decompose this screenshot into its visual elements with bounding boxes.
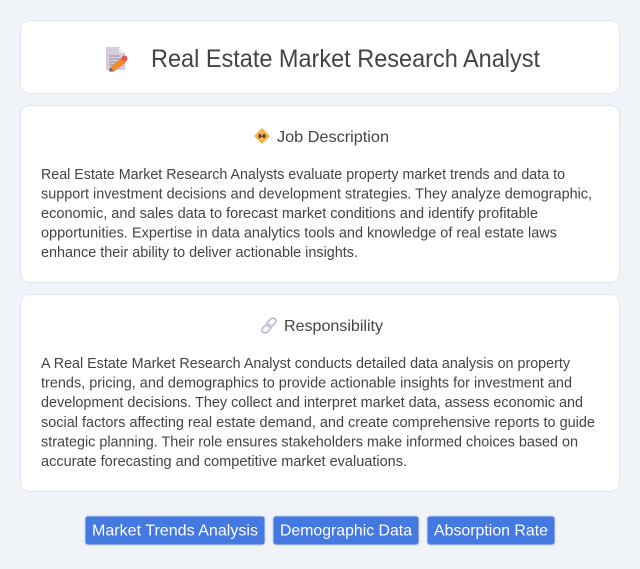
text block: responsibility: development decisions. They collect and interpret market data, assess economic and xyxy=(41,395,583,411)
tag: market trends analysis: Market Trends Analysis xyxy=(92,522,258,540)
text block: responsibility: A Real Estate Market Research Analyst conducts detailed data analysis on property xyxy=(41,356,571,372)
tag: demographic data xyxy=(273,516,419,545)
text block: job description: support investment decisions and development strategies. They analyze demographic, xyxy=(41,186,592,202)
tag: absorption rate xyxy=(427,516,555,545)
heading: job description: Job Description xyxy=(277,129,389,146)
heading: responsibility: Responsibility xyxy=(284,318,383,335)
text block: job description xyxy=(41,167,592,261)
icon: diamond sign xyxy=(254,128,270,144)
text block: job description: Real Estate Market Research Analysts evaluate property market trends and data to xyxy=(41,167,565,183)
tag: absorption rate: Absorption Rate xyxy=(434,522,548,540)
title: Real Estate Market Research Analyst xyxy=(151,45,540,73)
text block: responsibility: social factors affecting real estate demand, and create comprehensive reports to guide xyxy=(41,415,595,431)
panel: responsibility xyxy=(20,294,620,492)
text block: responsibility: strategic planning. Their role ensures stakeholders make informed choices based on xyxy=(41,434,578,450)
icon: document with pencil xyxy=(106,47,128,72)
text block: responsibility xyxy=(41,356,595,470)
text block: job description: opportunities. Expertise in data analytics tools and knowledge of real estate laws xyxy=(41,226,557,242)
panel: job description xyxy=(20,106,620,282)
text block: job description: economic, and sales data to forecast market conditions and identify profitable xyxy=(41,206,538,222)
text block: responsibility: trends, pricing, and demographics to provide actionable insights for investment and xyxy=(41,376,572,392)
panel: title card xyxy=(20,20,620,94)
tag: market trends analysis xyxy=(85,516,265,545)
tag: demographic data: Demographic Data xyxy=(280,522,412,540)
icon: chain link xyxy=(261,317,277,334)
text block: responsibility: accurate forecasting and competitive market evaluations. xyxy=(41,454,407,470)
text block: job description: enhance their ability to deliver actionable insights. xyxy=(41,245,358,261)
